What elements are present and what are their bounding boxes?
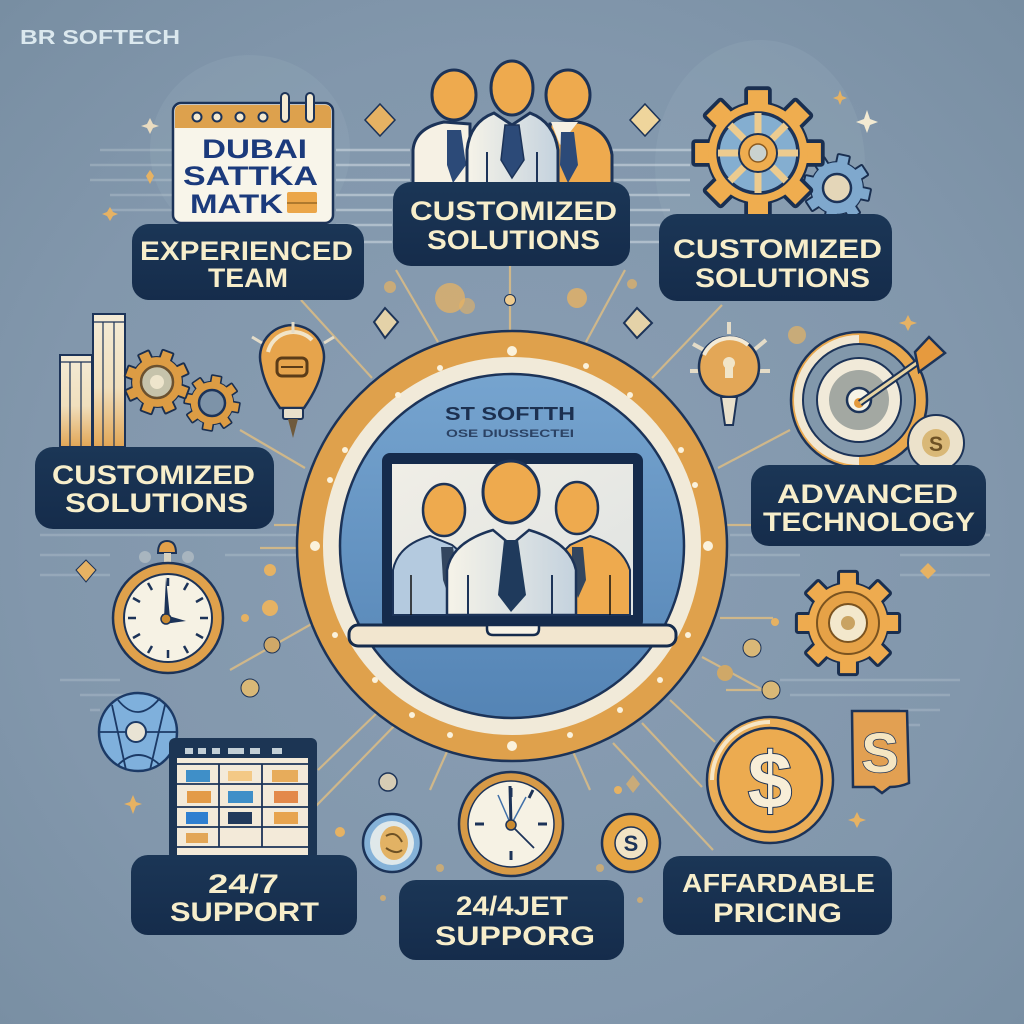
label: experienced team: EXPERIENCED	[140, 236, 353, 266]
icon: small coin right	[602, 814, 660, 872]
icon: bar chart and gears left	[60, 314, 244, 447]
radiating lines	[230, 266, 790, 850]
label: customized solutions left: CUSTOMIZED	[52, 460, 255, 490]
label: affordable pricing: AFFARDABLE	[682, 868, 875, 898]
label: customized solutions right: CUSTOMIZED	[673, 234, 882, 264]
icon: dollar coin	[707, 717, 833, 843]
icon: dollar coin: $	[748, 736, 792, 825]
label: customized solutions left	[35, 447, 274, 529]
decorative stripes	[40, 150, 990, 725]
label: advanced technology: ADVANCED	[777, 479, 958, 509]
label: customized solutions left: SOLUTIONS	[65, 488, 248, 518]
label: affordable pricing: PRICING	[713, 898, 842, 928]
label: customized solutions right: SOLUTIONS	[695, 263, 870, 293]
icon: calendar	[173, 93, 333, 223]
icon: target with dart	[791, 332, 964, 471]
label: customized solutions top: CUSTOMIZED	[410, 196, 617, 226]
icon: calendar: SATTKA	[183, 161, 318, 191]
ring dots	[310, 346, 713, 751]
icon: gears top right	[693, 88, 877, 228]
laptop	[349, 453, 676, 646]
label: experienced team: TEAM	[208, 263, 288, 293]
label: customized solutions top: SOLUTIONS	[427, 225, 600, 255]
decorative soft blobs	[150, 40, 865, 290]
icon: small coin right: S	[624, 831, 638, 856]
central badge: OSE DIUSSECTEI	[446, 428, 574, 440]
icon: light bulb	[252, 322, 334, 438]
icon: dashboard table	[169, 738, 317, 860]
icon: price tag: S	[861, 721, 899, 784]
label: advanced technology: TECHNOLOGY	[763, 507, 975, 537]
icon: compass bulb right	[690, 322, 770, 425]
label: 24/7 support	[131, 855, 357, 935]
central badge	[297, 331, 727, 761]
icon: globe	[99, 693, 177, 771]
label: 24/7 support: SUPPORT	[170, 897, 320, 927]
label: 24/7 support center: SUPPORG	[435, 921, 595, 951]
label: customized solutions right	[659, 214, 892, 301]
label: 24/7 support center	[399, 880, 624, 960]
heading inside badge: ST SOFTTH	[445, 404, 575, 424]
brand label: BR SOFTECH	[20, 27, 180, 49]
label: affordable pricing	[663, 856, 892, 935]
label: experienced team	[132, 224, 364, 300]
icon: gear right	[796, 571, 900, 675]
person left	[393, 484, 470, 615]
label: customized solutions top	[393, 182, 630, 266]
person right	[555, 482, 630, 615]
label: 24/7 support center: 24/4JET	[456, 891, 569, 921]
label: 24/7 support: 24/7	[208, 869, 279, 899]
label: advanced technology	[751, 465, 986, 546]
decorative sparkles and dots	[76, 90, 936, 903]
icon: price tag	[852, 711, 909, 793]
icon: team of three top	[413, 61, 612, 184]
icon: clock bottom	[459, 772, 563, 876]
icon: calendar: DUBAI	[202, 134, 307, 164]
icon: stopwatch	[113, 541, 223, 673]
icon: calendar: MATK	[190, 189, 284, 219]
person centre	[447, 461, 576, 615]
icon: target with dart: S	[929, 433, 943, 456]
icon: small coin left	[363, 814, 421, 872]
